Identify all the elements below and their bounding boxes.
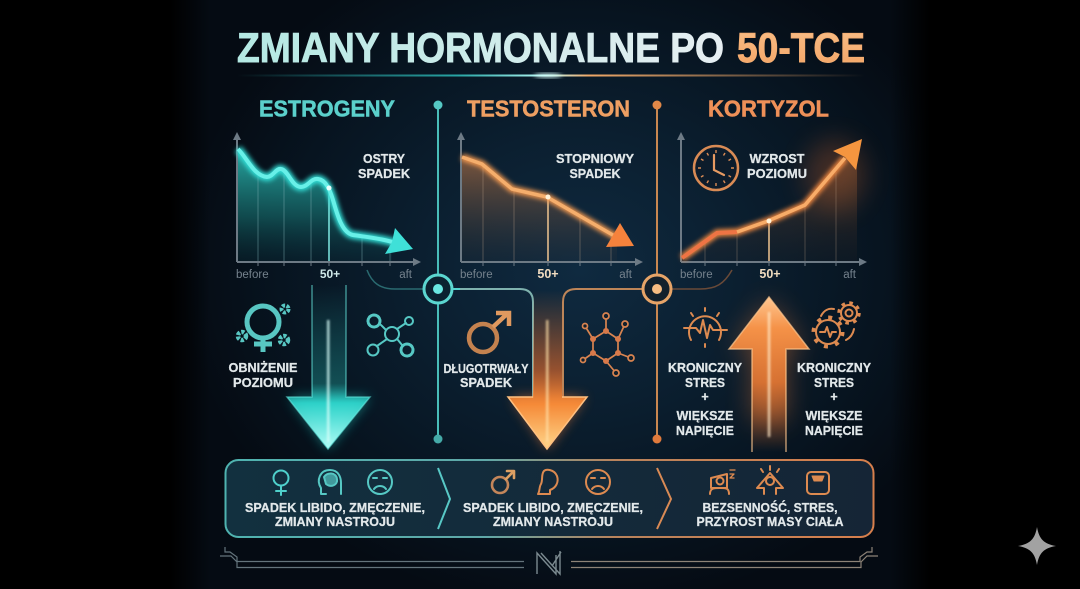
chart: kortyzol: 50+	[759, 267, 781, 281]
heading: testosteron: TESTOSTERON	[467, 96, 630, 122]
title: 50-TCE	[737, 24, 865, 71]
label: kroniczny stres, większe napięcie left: WIĘKSZE	[676, 409, 734, 423]
text: effects one: SPADEK LIBIDO, ZMĘCZENIE,	[245, 501, 425, 515]
label: kroniczny stres, większe napięcie left: KRONICZNY	[668, 361, 743, 375]
label: ostry spadek	[358, 152, 410, 181]
chart: testosteron	[457, 132, 643, 281]
label: kroniczny stres, większe napięcie right	[797, 361, 872, 438]
label: kroniczny stres, większe napięcie right: WIĘKSZE	[806, 409, 862, 423]
icon: teal molecule	[368, 315, 413, 356]
icon: clock	[694, 146, 738, 190]
icon: head with brain	[319, 470, 341, 494]
heading: kortyzol: KORTYZOL	[708, 96, 829, 122]
text: effects two: SPADEK LIBIDO, ZMĘCZENIE,	[463, 501, 643, 515]
chart: kortyzol: aft	[843, 269, 857, 281]
chart: testosteron: aft	[619, 269, 633, 281]
label: długotrwały spadek: DŁUGOTRWAŁY	[444, 362, 529, 376]
footer logo	[537, 551, 561, 574]
icon: gears	[814, 303, 859, 346]
icon: stress gauge	[684, 308, 727, 347]
label: kroniczny stres, większe napięcie right: +	[830, 390, 838, 404]
text: effects one	[245, 501, 425, 529]
label: kroniczny stres, większe napięcie left: NAPIĘCIE	[676, 424, 734, 438]
label: długotrwały spadek: SPADEK	[460, 376, 512, 390]
icon: insomnia	[710, 470, 735, 494]
chart: testosteron: before	[460, 269, 493, 281]
arrow: chevron two	[657, 468, 671, 529]
label: wzrost poziomu: WZROST	[750, 152, 805, 166]
label: kroniczny stres, większe napięcie left	[668, 361, 743, 438]
label: kroniczny stres, większe napięcie left: STRES	[685, 376, 725, 390]
text: effects three: BEZSENNOŚĆ, STRES,	[702, 500, 838, 515]
title: ZMIANY HORMONALNE PO	[237, 24, 724, 71]
chart: kortyzol: before	[680, 269, 713, 281]
arrow: teal down	[287, 285, 370, 449]
icon: sad face orange	[586, 470, 610, 494]
label: ostry spadek: SPADEK	[358, 167, 410, 181]
text: effects two	[463, 501, 643, 529]
heading: estrogeny: ESTROGENY	[259, 96, 395, 122]
panel: skutki	[226, 460, 874, 537]
label: stopniowy spadek: SPADEK	[570, 167, 620, 181]
label: stopniowy spadek: STOPNIOWY	[556, 152, 635, 166]
label: obniżenie poziomu: OBNIŻENIE	[228, 360, 298, 375]
chart: estrogeny: 50+	[320, 267, 340, 281]
text: effects one: ZMIANY NASTROJU	[275, 515, 395, 529]
label: wzrost poziomu	[747, 152, 807, 181]
label: obniżenie poziomu	[228, 360, 298, 390]
text: effects two: ZMIANY NASTROJU	[493, 515, 613, 529]
label: kroniczny stres, większe napięcie left: +	[701, 390, 709, 404]
chart: kortyzol	[677, 132, 867, 281]
text: effects three: PRZYROST MASY CIAŁA	[696, 515, 844, 529]
footer ornament right	[571, 547, 878, 568]
icon: orange molecule	[580, 313, 634, 376]
arrow: orange up	[729, 297, 809, 452]
label: kroniczny stres, większe napięcie right: STRES	[814, 376, 854, 390]
title underline glow	[237, 74, 865, 78]
label: obniżenie poziomu: POZIOMU	[233, 376, 293, 390]
icon: male symbol	[469, 313, 509, 352]
arrow: chevron one	[438, 468, 450, 529]
arrow: orange down	[508, 290, 587, 449]
label: kroniczny stres, większe napięcie right: KRONICZNY	[797, 361, 872, 375]
chart: estrogeny	[233, 132, 421, 281]
icon: female small	[274, 470, 288, 495]
icon: sparkle watermark	[1018, 527, 1056, 565]
connector: orange divider	[563, 100, 732, 444]
icon: male small	[492, 471, 514, 493]
label: wzrost poziomu: POZIOMU	[747, 167, 807, 181]
label: długotrwały spadek	[444, 362, 529, 390]
icon: female symbol with flowers	[238, 306, 288, 352]
icon: head profile	[538, 470, 558, 494]
label: kroniczny stres, większe napięcie right: NAPIĘCIE	[805, 424, 863, 438]
chart: estrogeny: before	[236, 269, 269, 281]
icon: stressed person	[757, 466, 783, 494]
chart: estrogeny: aft	[399, 269, 413, 281]
label: ostry spadek: OSTRY	[363, 152, 406, 166]
label: stopniowy spadek	[556, 152, 635, 181]
footer ornament left	[220, 547, 524, 568]
icon: scale	[807, 472, 829, 494]
connector: teal divider	[367, 100, 533, 444]
icon: sad face teal	[368, 470, 392, 494]
chart: testosteron: 50+	[537, 267, 559, 281]
text: effects three	[696, 500, 844, 529]
